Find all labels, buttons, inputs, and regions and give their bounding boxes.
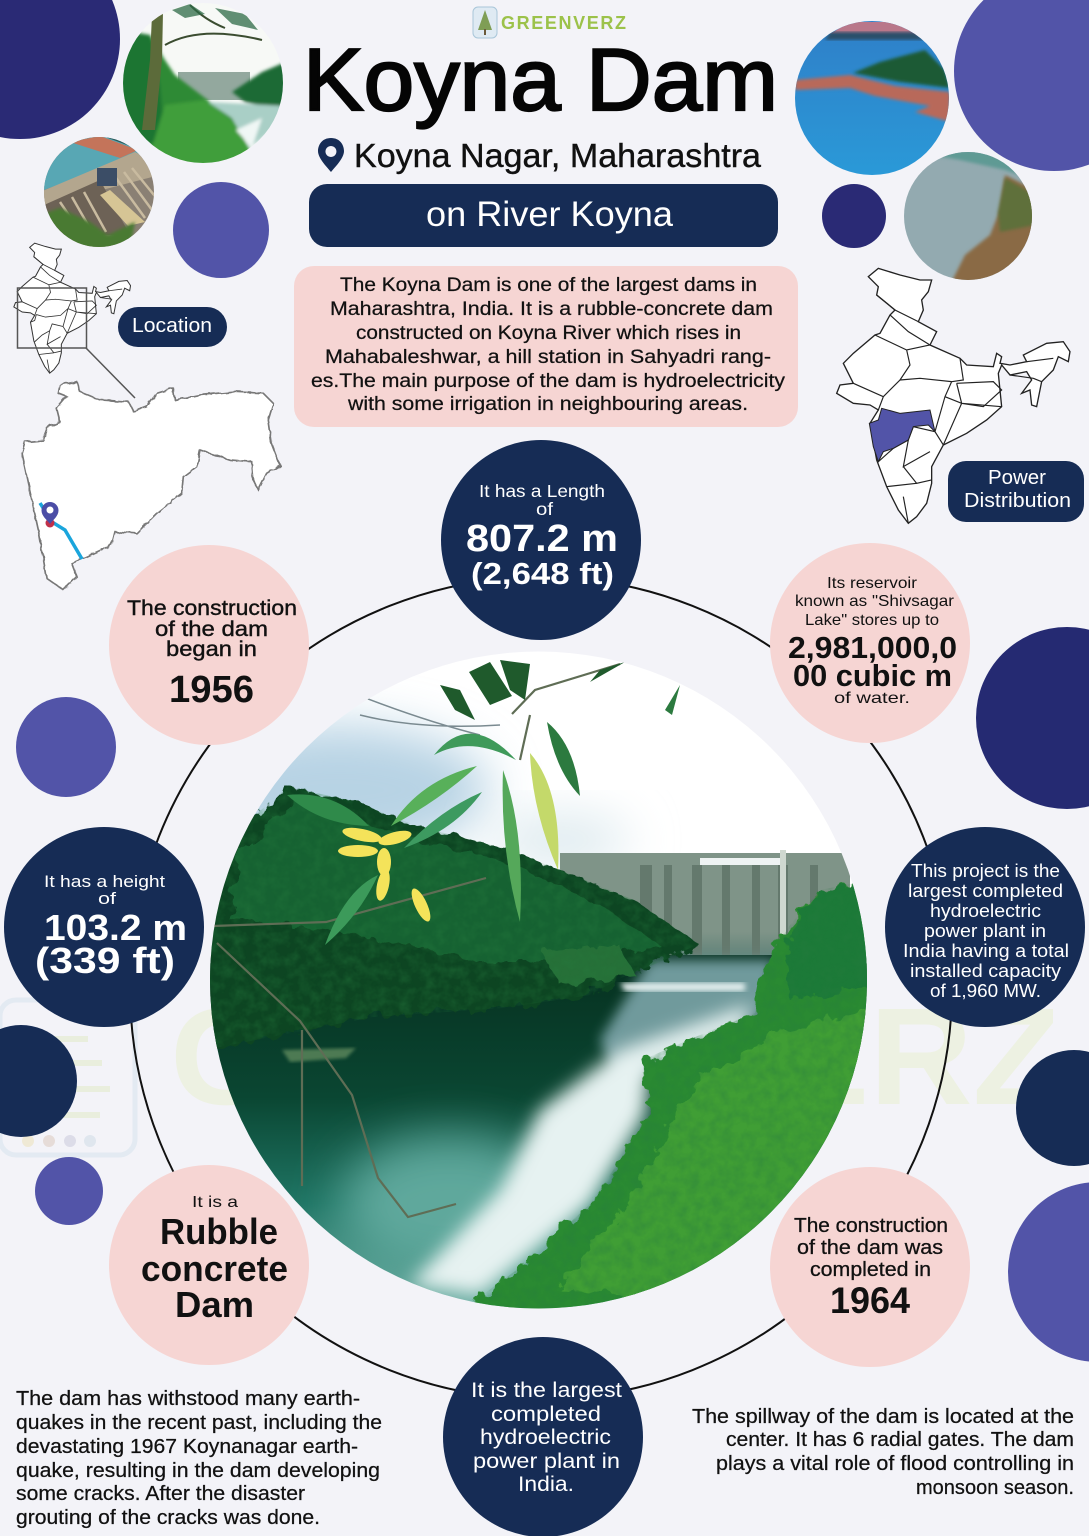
foliage texture <box>205 780 875 1310</box>
stat: installed capacity: This project is the <box>911 861 1060 881</box>
stat: construction began: of the dam <box>155 617 268 641</box>
stat: length: 807.2 m <box>466 518 618 560</box>
stat: reservoir: 00 cubic m <box>793 658 952 693</box>
text block: earthquakes: some cracks. After the disaster <box>16 1483 305 1505</box>
stat: construction completed: completed in <box>810 1259 931 1281</box>
location label <box>118 307 227 347</box>
stat: height: It has a height <box>44 872 165 891</box>
stat: dam type: concrete <box>141 1248 288 1289</box>
stat: installed capacity: largest completed <box>908 881 1063 901</box>
stat: largest plant: power plant in <box>473 1450 620 1473</box>
yellow flowers <box>338 825 434 924</box>
description panel: Maharashtra, India. It is a rubble-concrete dam <box>330 298 773 320</box>
stat: construction began <box>109 545 309 745</box>
stat: construction completed: The construction <box>794 1215 948 1237</box>
river line <box>40 503 82 559</box>
text block: earthquakes: grouting of the cracks was done. <box>16 1507 320 1529</box>
stat: height: 103.2 m <box>44 907 187 948</box>
stat: length <box>441 440 641 640</box>
connecting ring <box>130 577 952 1399</box>
power distribution label: Distribution <box>964 490 1071 512</box>
description panel: with some irrigation in neighbouring areas. <box>347 393 748 415</box>
text block: spillway: plays a vital role of flood controlling in <box>716 1453 1074 1475</box>
stat: largest plant: It is the largest <box>471 1379 622 1402</box>
locator box and leader <box>18 288 135 398</box>
icon: location marker <box>42 502 58 528</box>
map: Maharashtra <box>22 382 280 590</box>
power distribution label <box>948 461 1084 522</box>
stat: installed capacity: hydroelectric <box>930 901 1041 921</box>
icon: tree logo <box>473 7 497 38</box>
text block: earthquakes: The dam has withstood many earth- <box>16 1388 360 1410</box>
location text: Koyna Nagar, Maharashtra <box>354 137 762 174</box>
text block: spillway: monsoon season. <box>916 1477 1074 1499</box>
description panel: es.The main purpose of the dam is hydroelectricity <box>311 370 785 392</box>
stat: dam type <box>109 1165 309 1365</box>
photo: forest and dam <box>123 4 283 163</box>
text block: spillway: center. It has 6 radial gates. The dam <box>726 1429 1074 1451</box>
stat: construction completed <box>770 1167 970 1367</box>
dam wall <box>560 850 850 960</box>
power distribution label: Power <box>988 467 1046 489</box>
stat: installed capacity: installed capacity <box>910 961 1061 981</box>
title: Koyna Dam <box>303 30 778 129</box>
stat: height: (339 ft) <box>35 940 175 981</box>
icon: map pin <box>318 138 344 172</box>
stat: length: of <box>536 499 553 519</box>
left forest <box>205 787 699 1050</box>
stat: height <box>4 827 204 1027</box>
location line <box>318 137 762 174</box>
stat: largest plant: hydroelectric <box>480 1426 611 1449</box>
right bank <box>470 880 880 1320</box>
stat: installed capacity: power plant in <box>924 921 1046 941</box>
photo: dam spillway <box>44 137 154 247</box>
stat: height: of <box>98 889 116 908</box>
state: Maharashtra highlighted <box>869 408 935 462</box>
description panel <box>294 266 798 427</box>
stat: length: It has a Length <box>479 481 605 501</box>
text block: spillway <box>692 1406 1074 1499</box>
text block: earthquakes: devastating 1967 Koynanagar earth- <box>16 1436 358 1458</box>
brand name: GREENVERZ <box>501 13 626 33</box>
stat: reservoir: known as "Shivsagar <box>795 593 955 610</box>
description panel: constructed on Koyna River which rises in <box>356 322 741 344</box>
stat: reservoir: of water. <box>834 690 910 707</box>
photo: blue reservoir <box>795 21 949 175</box>
text block: earthquakes <box>16 1388 382 1529</box>
stat: reservoir <box>770 543 970 743</box>
map: India power distribution <box>837 268 1070 523</box>
central photo: dam and river <box>190 648 880 1320</box>
description panel: Mahabaleshwar, a hill station in Sahyadri rang- <box>325 346 771 368</box>
text block: earthquakes: quakes in the recent past, including the <box>16 1412 382 1434</box>
stat: dam type: Dam <box>175 1284 254 1325</box>
stat: installed capacity <box>885 827 1085 1027</box>
logo <box>473 7 626 38</box>
watermark: GREENVERZ <box>170 980 1060 1134</box>
water <box>205 955 875 1310</box>
stat: reservoir: Lake" stores up to <box>805 612 939 629</box>
location label: Location <box>132 315 212 337</box>
stat: installed capacity: India having a total <box>903 941 1069 961</box>
hanging branch and leaves <box>213 660 680 1217</box>
description panel: The Koyna Dam is one of the largest dams in <box>340 274 757 296</box>
stat: construction began: 1956 <box>169 669 254 711</box>
river banner: on River Koyna <box>426 195 674 234</box>
stat: construction began: The construction <box>127 596 297 620</box>
stat: largest plant: completed <box>491 1403 601 1426</box>
stat: largest plant <box>443 1337 643 1536</box>
stat: largest plant: India. <box>518 1473 574 1496</box>
text block: earthquakes: quake, resulting in the dam developing <box>16 1460 380 1482</box>
stat: reservoir: 2,981,000,0 <box>788 630 957 665</box>
stat: length: (2,648 ft) <box>471 556 614 591</box>
map: India locator <box>14 243 131 373</box>
stat: construction began: began in <box>166 637 257 661</box>
river banner <box>309 184 778 247</box>
stat: installed capacity: of 1,960 MW. <box>930 981 1041 1001</box>
stat: reservoir: Its reservoir <box>827 575 918 592</box>
stat: construction completed: 1964 <box>830 1280 910 1321</box>
stat: construction completed: of the dam was <box>797 1237 943 1259</box>
text block: spillway: The spillway of the dam is located at the <box>692 1406 1074 1428</box>
photo: grey water and rocks <box>904 152 1032 280</box>
stat: dam type: It is a <box>192 1194 238 1211</box>
stat: dam type: Rubble <box>160 1211 278 1252</box>
